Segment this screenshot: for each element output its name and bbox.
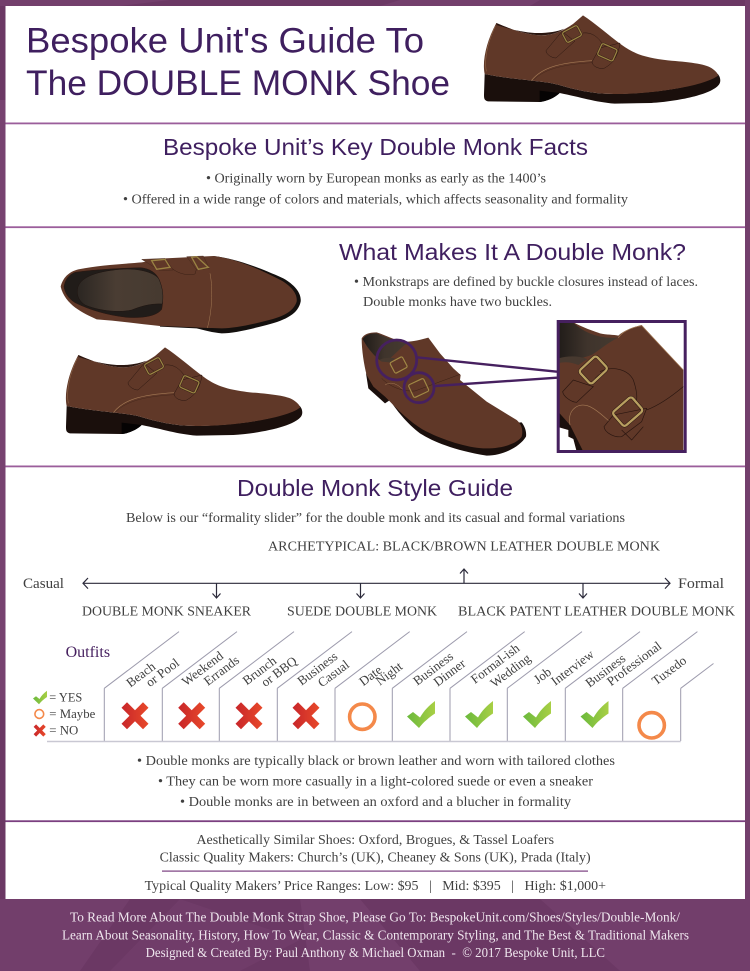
slider bottom labels: DOUBLE MONK SNEAKER xyxy=(82,604,251,619)
text block: style notes xyxy=(137,753,615,809)
outfit labels: Errands xyxy=(201,652,242,689)
footer text: Learn About Seasonality, History, How To Wear, Classic & Contemporary Styling, and The Best & Traditional Makers xyxy=(62,927,689,942)
legend: = Maybe xyxy=(49,707,96,721)
text block: similar shoes and makers: Classic Quality Makers: Church’s (UK), Cheaney & Sons (UK), Prada (Italy) xyxy=(160,850,591,865)
text block: style notes: • Double monks are typically black or brown leather and worn with tailored clothes xyxy=(137,753,615,768)
text block: slider intro: Below is our “formality slider” for the double monk and its casual and formal variations xyxy=(126,510,625,525)
outfit labels: or Pool xyxy=(143,655,182,690)
text block: monkstrap definition: • Monkstraps are defined by buckle closures instead of laces. xyxy=(354,274,698,289)
text block: monkstrap definition xyxy=(354,274,698,309)
text block: key facts: • Offered in a wide range of colors and materials, which affects seasonality and formality xyxy=(123,192,628,206)
slider bottom labels: SUEDE DOUBLE MONK xyxy=(287,604,437,619)
outfit labels: Date xyxy=(356,662,385,689)
callout: zoom circles and connector lines xyxy=(377,340,557,403)
slider axis and arrows xyxy=(83,569,670,598)
outfit labels: Job xyxy=(531,664,554,687)
outfit labels: Interview xyxy=(548,646,597,688)
heading: style guide: Double Monk Style Guide xyxy=(237,475,513,501)
slider bottom labels: BLACK PATENT LEATHER DOUBLE MONK xyxy=(458,604,735,619)
outfit labels: Business xyxy=(294,649,340,688)
legend: = YES xyxy=(49,690,82,704)
slider left label: Casual xyxy=(23,576,64,592)
callout: zoomed buckle detail xyxy=(557,320,687,453)
icon: header double monk shoe xyxy=(484,15,720,104)
text block: style notes: • They can be worn more casually in a light-colored suede or even a sneaker xyxy=(158,774,594,788)
slider top label: ARCHETYPICAL: BLACK/BROWN LEATHER DOUBLE MONK xyxy=(268,539,660,554)
outfit labels: Formal-ish xyxy=(468,640,523,687)
text block: similar shoes and makers: Aesthetically Similar Shoes: Oxford, Brogues, & Tassel Loafers xyxy=(196,832,554,847)
legend: = NO xyxy=(49,724,78,738)
text block: key facts: • Originally worn by European monks as early as the 1400’s xyxy=(206,171,546,186)
chart: outfit table grid xyxy=(47,632,714,742)
title: The DOUBLE MONK Shoe xyxy=(26,64,450,103)
outfit labels: Beach xyxy=(123,658,158,690)
illustration: side view shoe xyxy=(66,347,302,436)
heading: key facts: Bespoke Unit’s Key Double Monk Facts xyxy=(163,134,588,160)
footer text xyxy=(62,910,689,960)
outfit labels: Tuxedo xyxy=(649,653,689,688)
section dividers xyxy=(6,122,745,822)
outfit labels xyxy=(123,638,689,690)
outfit labels: Brunch xyxy=(239,653,279,688)
outfit labels: Business xyxy=(582,651,628,690)
outfit labels: Weekend xyxy=(179,648,226,689)
slider right label: Formal xyxy=(678,576,724,592)
text block: key facts xyxy=(123,171,628,206)
outfit labels: Business xyxy=(410,649,456,688)
legend xyxy=(33,690,96,738)
outfit labels: Wedding xyxy=(487,650,534,690)
outfit labels: Night xyxy=(373,658,406,688)
text block: style notes: • Double monks are in between an oxford and a blucher in formality xyxy=(180,794,571,809)
title xyxy=(26,22,450,103)
slider bottom labels xyxy=(82,604,735,619)
chart: formality slider xyxy=(23,539,735,619)
outfit labels: or BBQ xyxy=(258,653,300,690)
outfit labels: Professional xyxy=(604,638,664,689)
illustration: three-quarter shoe with callout xyxy=(362,332,526,456)
footer text: To Read More About The Double Monk Strap Shoe, Please Go To: BespokeUnit.com/Shoes/Styles/Double-Monk/ xyxy=(70,910,680,925)
text block: price ranges: Typical Quality Makers’ Price Ranges: Low: $95 | Mid: $395 | High: $1,000+ xyxy=(145,878,606,893)
illustration: top view shoe xyxy=(61,256,301,333)
outfit labels: Dinner xyxy=(430,655,469,689)
heading: what makes it a double monk: What Makes It A Double Monk? xyxy=(339,239,686,265)
icons: outfit ratings xyxy=(122,701,664,738)
text block: monkstrap definition: Double monks have two buckles. xyxy=(363,294,552,309)
outfit labels: Casual xyxy=(315,657,352,690)
title: Bespoke Unit's Guide To xyxy=(26,22,424,61)
heading: outfits: Outfits xyxy=(66,644,110,661)
footer text: Designed & Created By: Paul Anthony & Michael Oxman - © 2017 Bespoke Unit, LLC xyxy=(146,945,605,960)
text block: similar shoes and makers xyxy=(160,832,591,865)
